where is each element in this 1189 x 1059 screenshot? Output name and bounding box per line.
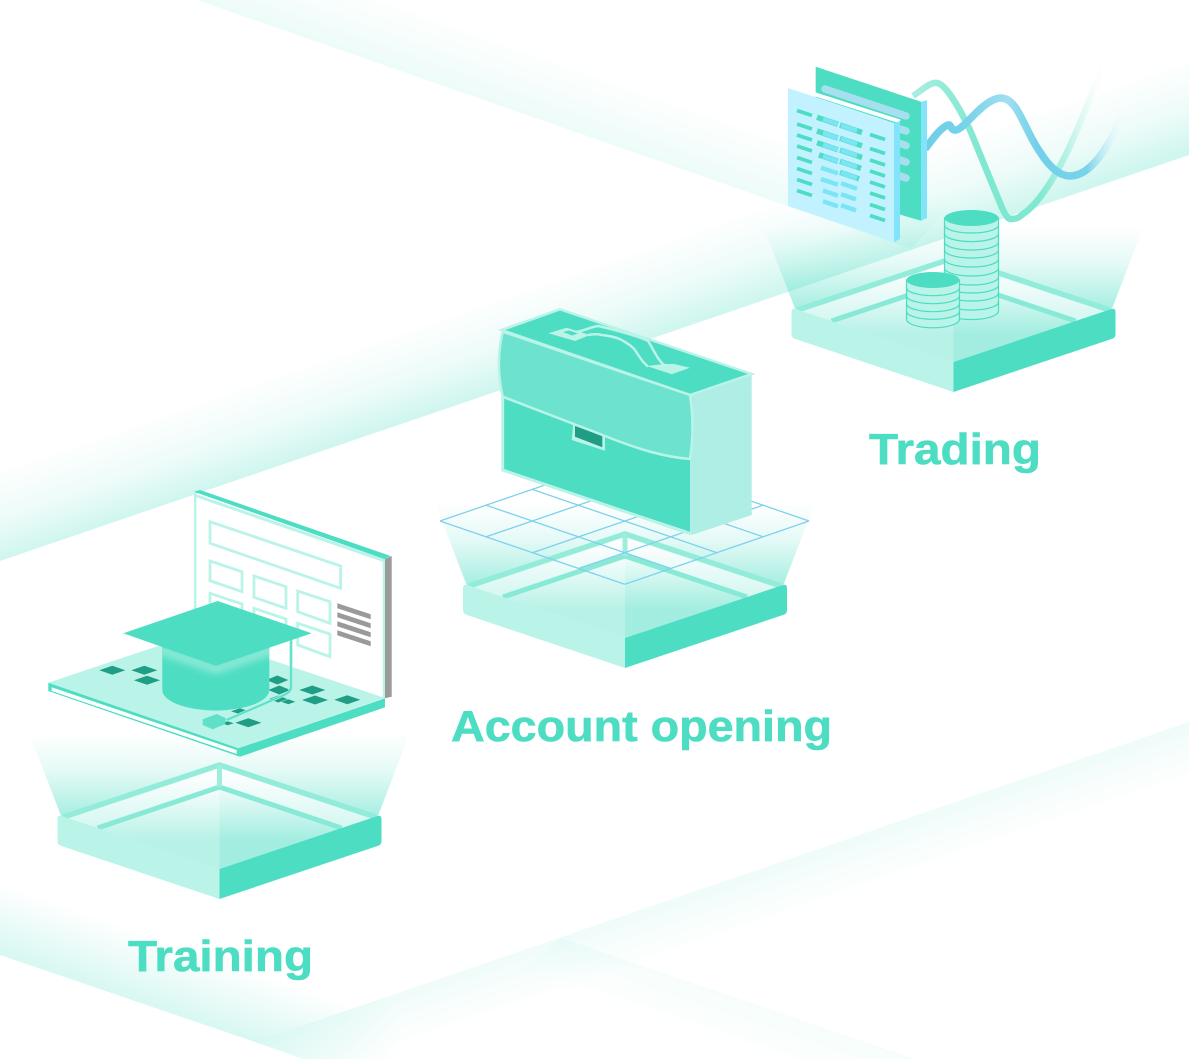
icon: short coin stack [906, 272, 960, 328]
step: Trading [764, 57, 1144, 474]
cap tassel [203, 640, 291, 729]
icon: graduation cap [123, 601, 312, 729]
briefcase clasp [572, 423, 605, 451]
icon: chart lines [913, 57, 1127, 219]
platform: training [30, 669, 410, 899]
icon: briefcase [499, 309, 752, 535]
platform: trading [764, 162, 1144, 392]
briefcase handle [548, 326, 690, 374]
label: Trading: Trading [869, 425, 1041, 474]
platform: account opening [435, 438, 815, 668]
laptop screen [194, 490, 392, 700]
briefcase flap [499, 332, 692, 459]
laptop base [48, 634, 385, 757]
step: Training [30, 490, 410, 981]
icon: back report sheet [816, 67, 927, 221]
icon: tall coin stack [944, 210, 998, 320]
label: Account opening: Account opening [451, 702, 832, 751]
laptop keys [99, 666, 360, 727]
label: Training: Training [128, 932, 313, 981]
icon: laptop [48, 490, 392, 757]
icon: blue grid [440, 458, 809, 584]
step: Account opening [435, 309, 832, 751]
icon: front report sheet [788, 88, 900, 242]
